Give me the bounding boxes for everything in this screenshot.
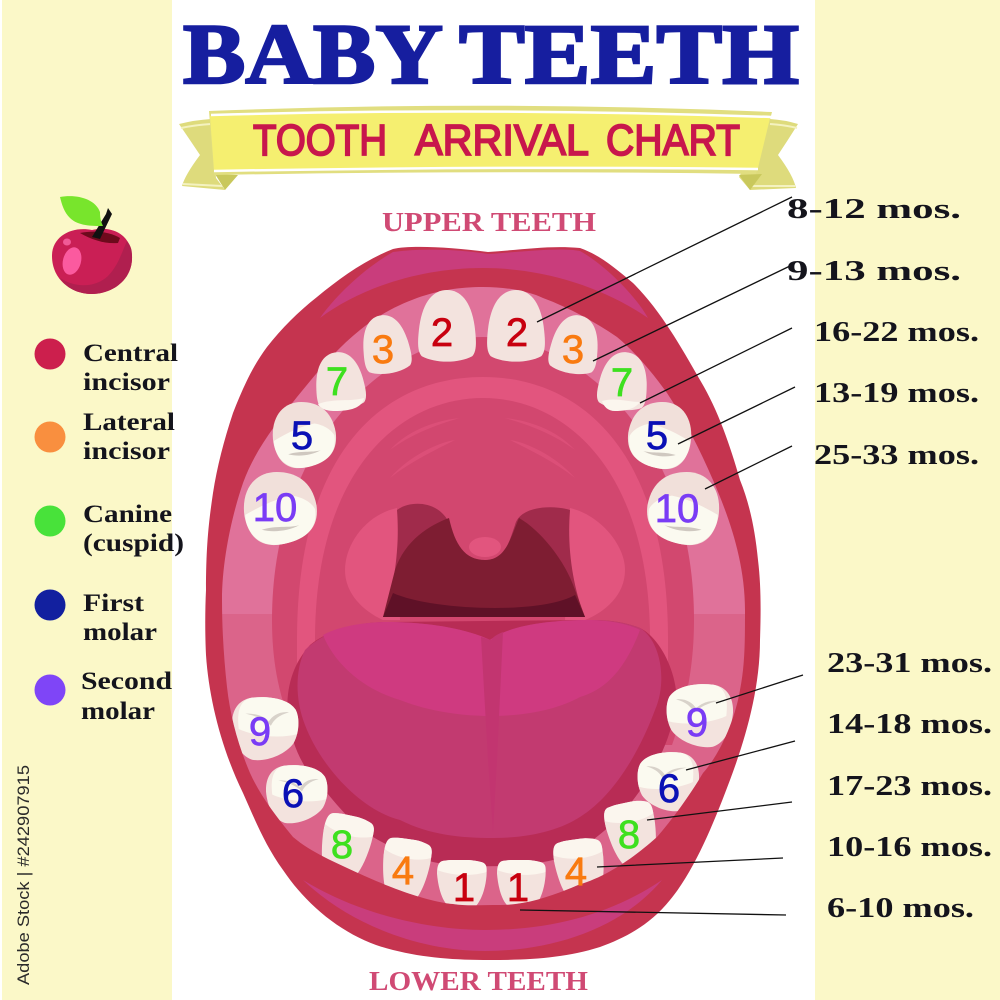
legend: central incisor: incisor xyxy=(83,369,170,396)
upper arrival ages: 9-13 mos. xyxy=(787,256,961,287)
tooth 10 upper left xyxy=(244,472,317,545)
lip base xyxy=(205,247,761,960)
stock id: Adobe Stock | #242907915 xyxy=(14,765,33,985)
ribbon band xyxy=(209,106,772,175)
ribbon right tail xyxy=(739,119,798,190)
throat depth xyxy=(383,593,585,617)
tooth numbers: 7 xyxy=(611,361,633,405)
upper lip highlight xyxy=(320,249,648,318)
apple hole xyxy=(80,232,120,243)
upper teeth xyxy=(244,290,719,545)
tooth numbers: 6 xyxy=(658,767,680,811)
tooth numbers: 10 xyxy=(253,486,297,530)
ribbon text: TOOTH xyxy=(253,116,387,165)
legend: first molar: First xyxy=(83,590,145,617)
ribbon text: ARRIVAL xyxy=(415,116,589,165)
tooth numbers: 8 xyxy=(618,813,640,857)
lower arrival ages: 14-18 mos. xyxy=(827,709,992,740)
legend: second molar: Second xyxy=(81,668,172,695)
legend: lateral incisor: incisor xyxy=(83,438,170,465)
tooth 6 lower right xyxy=(638,752,699,811)
legend: lateral incisor xyxy=(34,409,175,465)
apple icon xyxy=(52,196,132,294)
tooth numbers: 1 xyxy=(453,866,475,910)
tooth 7 upper right xyxy=(595,349,652,413)
legend: second molar xyxy=(34,668,172,725)
legend: first molar xyxy=(34,590,157,646)
tongue top xyxy=(323,620,640,716)
upper teeth heading: UPPER TEETH xyxy=(382,207,596,237)
tooth numbers: 4 xyxy=(565,850,587,894)
tooth numbers: 10 xyxy=(655,487,699,531)
tooth numbers: 9 xyxy=(249,710,271,754)
tooth numbers: 6 xyxy=(282,772,304,816)
right tonsil xyxy=(565,508,625,620)
title xyxy=(183,6,799,102)
lower teeth xyxy=(232,684,733,906)
ribbon highlights xyxy=(211,111,771,171)
tooth 1 lower right xyxy=(497,860,546,906)
ribbon banner xyxy=(179,106,798,190)
tooth numbers: 9 xyxy=(686,701,708,745)
leader lines xyxy=(520,197,803,915)
lower arrival ages: 23-31 mos. xyxy=(827,648,992,679)
tooth numbers: 1 xyxy=(507,866,529,910)
gum xyxy=(222,287,745,906)
palate folds xyxy=(390,418,575,478)
throat xyxy=(383,518,585,617)
tooth 5 upper right xyxy=(628,402,691,469)
mouth illustration xyxy=(200,247,770,960)
tooth numbers xyxy=(249,311,708,910)
ribbon text: CHART xyxy=(606,116,740,165)
tooth 2 upper right xyxy=(487,290,545,362)
uvula xyxy=(469,537,501,557)
ribbon left tail xyxy=(179,119,225,190)
tooth numbers: 4 xyxy=(392,849,414,893)
legend: central incisor xyxy=(34,338,178,396)
apple body xyxy=(52,229,132,294)
title: TEETH xyxy=(459,6,799,102)
legend: central incisor: Central xyxy=(83,340,178,367)
ribbon folds xyxy=(215,174,762,190)
apple shade xyxy=(60,241,132,294)
tooth numbers: 3 xyxy=(372,328,394,372)
upper arrival ages xyxy=(787,194,979,471)
lower lip highlight xyxy=(303,880,662,951)
tooth 4 lower left xyxy=(383,838,432,896)
palate outer xyxy=(272,337,694,745)
upper arrival ages: 25-33 mos. xyxy=(814,440,979,471)
apple leaf xyxy=(60,196,103,226)
tooth 7 upper left xyxy=(311,349,368,413)
tooth 2 upper left xyxy=(418,290,476,362)
lower arrival ages xyxy=(827,648,992,924)
lower arrival ages: 17-23 mos. xyxy=(827,771,992,802)
tooth 6 lower left xyxy=(266,765,327,823)
tongue furrow xyxy=(481,632,503,832)
apple highlights xyxy=(60,245,84,277)
tooth 8 lower left xyxy=(322,813,374,873)
legend xyxy=(34,338,184,725)
tooth numbers: 8 xyxy=(331,823,353,867)
legend: canine: Canine xyxy=(83,501,172,528)
left tonsil xyxy=(345,508,400,620)
tooth 4 lower right xyxy=(553,838,604,891)
tooth 1 lower left xyxy=(437,860,487,906)
tooth 10 upper right xyxy=(647,472,719,545)
tooth 5 upper left xyxy=(273,402,336,468)
legend: lateral incisor: Lateral xyxy=(83,409,175,436)
ribbon tail stripes xyxy=(181,124,797,186)
tooth numbers: 2 xyxy=(431,311,453,355)
legend: second molar: molar xyxy=(81,698,155,725)
upper arrival ages: 13-19 mos. xyxy=(814,378,979,409)
tooth 7 upper right highlight xyxy=(602,399,640,411)
tooth 3 upper right xyxy=(546,311,604,377)
palate ridge xyxy=(297,377,668,700)
tooth numbers: 2 xyxy=(506,311,528,355)
lower arrival ages: 6-10 mos. xyxy=(827,893,974,924)
palate inner xyxy=(315,398,650,700)
upper arrival ages: 8-12 mos. xyxy=(787,194,961,225)
ribbon text xyxy=(253,116,740,165)
upper arrival ages: 16-22 mos. xyxy=(814,317,979,348)
tooth numbers: 5 xyxy=(291,414,313,458)
apple stem xyxy=(92,208,112,239)
lower teeth heading: LOWER TEETH xyxy=(369,966,588,996)
tooth numbers: 5 xyxy=(646,414,668,458)
legend: first molar: molar xyxy=(83,619,157,646)
tooth numbers: 3 xyxy=(562,328,584,372)
tooth 8 lower right xyxy=(604,800,656,864)
ribbon band face xyxy=(210,112,770,170)
title: BABY xyxy=(183,6,443,102)
throat pillars xyxy=(383,504,585,617)
lower arrival ages: 10-16 mos. xyxy=(827,832,992,863)
mouth floor xyxy=(287,620,676,866)
legend: canine xyxy=(34,501,184,557)
tooth 9 lower left xyxy=(232,697,298,760)
legend: canine: (cuspid) xyxy=(83,530,184,557)
tongue xyxy=(298,620,661,838)
tooth 7 upper left highlight xyxy=(318,398,364,411)
tooth numbers: 7 xyxy=(326,360,348,404)
tooth 3 upper left xyxy=(357,311,414,377)
tooth 9 lower right xyxy=(667,684,733,747)
